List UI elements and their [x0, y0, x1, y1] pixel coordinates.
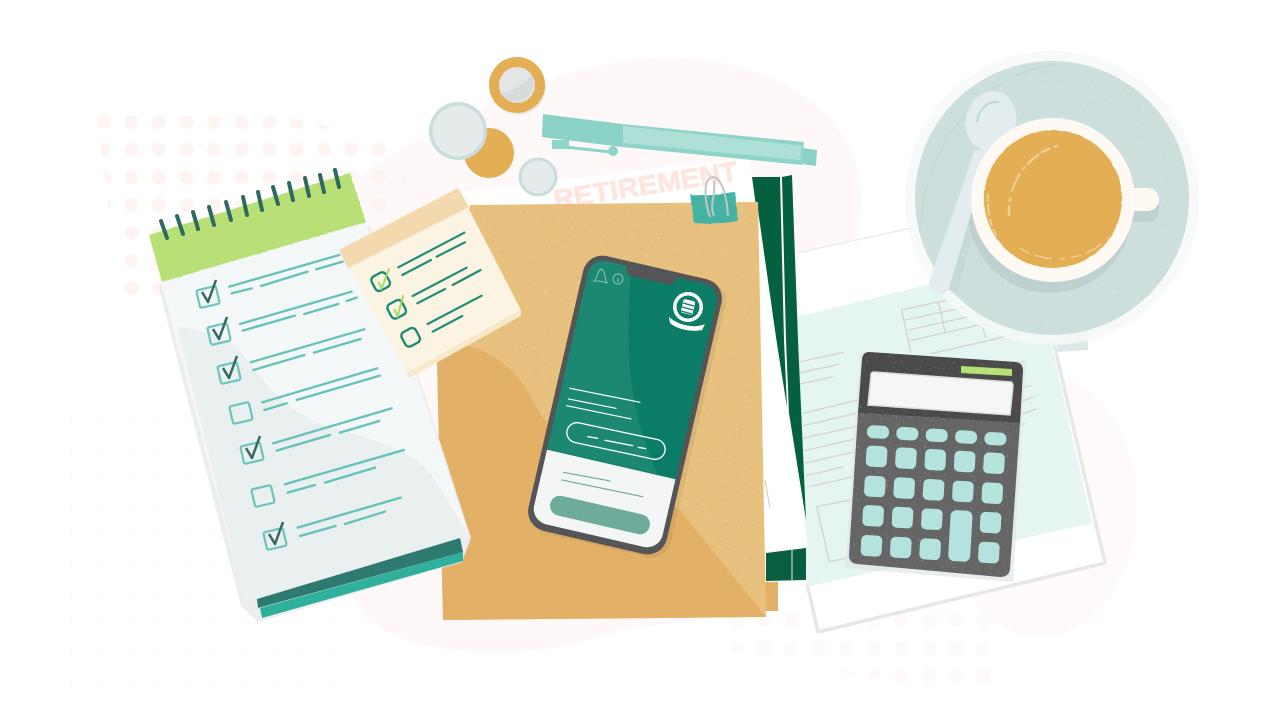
background blobs — [321, 58, 1137, 653]
coffee — [984, 130, 1122, 268]
saucer shadow over document — [1057, 328, 1088, 352]
phone screen lines — [562, 388, 646, 497]
coin: gold — [464, 128, 514, 178]
background dot pattern left — [96, 100, 412, 300]
coin: gold with silver centre — [489, 57, 546, 115]
cup — [971, 118, 1159, 282]
pen clip — [552, 140, 618, 156]
document with mint band — [797, 204, 1105, 632]
pen — [542, 114, 817, 166]
calculator shadow — [845, 352, 1026, 582]
folder back tab — [764, 582, 778, 611]
phone input pill — [565, 421, 667, 461]
sticky note header — [339, 188, 469, 268]
icon: info — [613, 274, 623, 284]
small paper mark — [765, 480, 770, 508]
cup shadow — [968, 129, 1159, 293]
phone body — [524, 252, 726, 558]
manila folder — [430, 202, 766, 625]
notepad shadow — [158, 225, 471, 622]
sticky note checkboxes — [370, 268, 421, 348]
notepad spiral — [161, 170, 339, 238]
smartphone — [524, 252, 730, 561]
saucer — [905, 51, 1199, 345]
calculator keys — [860, 425, 1007, 564]
notepad green header — [149, 173, 366, 282]
notepad — [149, 170, 471, 622]
binder clip — [690, 177, 738, 224]
saucer brush marks — [921, 65, 1055, 225]
notepad backing — [257, 538, 463, 618]
sticky note thickness — [407, 310, 521, 378]
background grid — [70, 395, 360, 690]
notepad text lines — [229, 255, 404, 536]
calculator — [845, 352, 1026, 582]
notepad checkboxes — [196, 286, 287, 550]
dark green folder — [752, 175, 806, 520]
icon: crest logo — [669, 292, 705, 331]
coins — [429, 57, 558, 196]
sticky note — [339, 188, 521, 378]
calculator screen — [868, 372, 1013, 415]
calculator body — [849, 413, 1020, 577]
sticky note page — [339, 188, 521, 373]
icon: bell — [594, 269, 607, 283]
illustration: retirement planning desk scene — [70, 57, 1189, 690]
phone button — [548, 494, 652, 536]
background dot pattern bottom right — [725, 612, 990, 684]
retirement paper — [463, 156, 754, 215]
notepad check marks — [202, 280, 283, 544]
calculator solar strip — [961, 366, 1012, 376]
coffee cup on saucer — [905, 51, 1199, 345]
green folder base — [766, 548, 806, 581]
coin: large silver — [429, 102, 487, 160]
white sheet — [757, 203, 808, 554]
sticky note lines — [398, 233, 482, 332]
coin: small silver — [518, 158, 558, 196]
document text lines and tables — [800, 298, 1037, 562]
phone notch — [624, 266, 677, 286]
notepad page — [160, 220, 469, 601]
phone screen — [530, 258, 720, 552]
spoon — [929, 86, 1023, 294]
calculator top — [858, 352, 1023, 423]
heading: retirement: RETIREMENT — [551, 156, 740, 215]
